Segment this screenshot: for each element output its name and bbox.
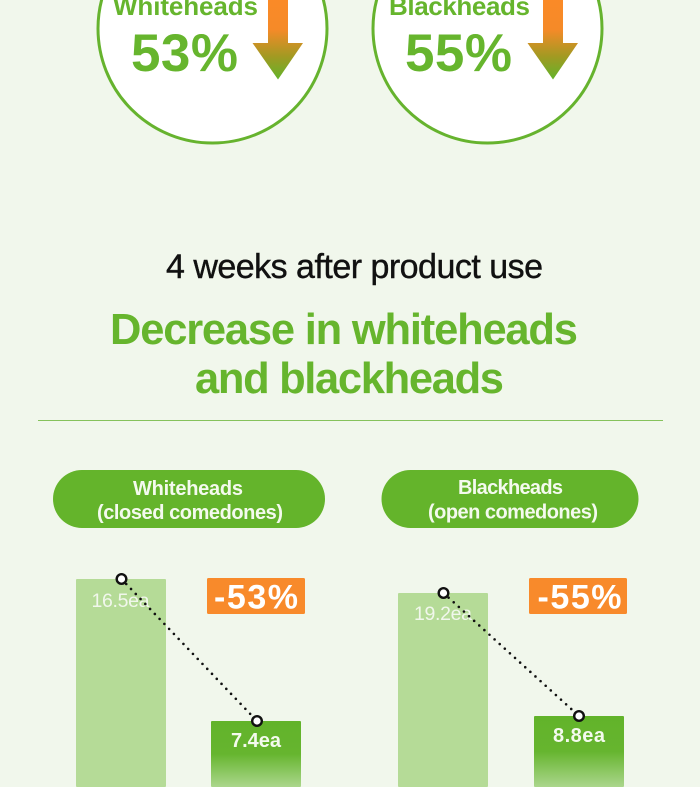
value: 8.8ea: 8.8ea [553,725,606,747]
value: 19.2ea: 19.2ea [414,603,472,625]
pill label: blackheads [382,470,638,528]
stat circle: whiteheads 53%: 53% [131,24,238,83]
bar chart: blackheads [398,578,627,787]
subheading: 4 weeks after product use [166,248,543,286]
stat circle: whiteheads 53% [98,0,327,143]
icon: down arrow [252,0,303,80]
dotted trend line [439,588,584,721]
badge: -55%: -55% [538,578,622,616]
value: 7.4ea: 7.4ea [231,730,282,752]
pill label: whiteheads [53,470,325,528]
bar chart: whiteheads [76,574,305,787]
bar: after 8.8ea [534,716,624,787]
heading: Decrease in whiteheads [110,306,578,354]
stat circle: blackheads 55% [373,0,602,143]
pill label: blackheads: Blackheads [458,477,563,499]
heading: and blackheads [195,355,504,403]
pill label: whiteheads: (closed comedones) [97,502,283,524]
pill label: blackheads: (open comedones) [428,502,598,524]
stat circle: blackheads 55%: 55% [405,24,512,83]
value: 16.5ea: 16.5ea [92,590,150,612]
bar: before 19.2ea [398,593,488,787]
bar: after 7.4ea [211,721,301,787]
dotted trend line [117,574,262,726]
pill label: whiteheads: Whiteheads [133,478,243,500]
badge: -53%: -53% [214,578,298,616]
bar: before 16.5ea [76,579,166,787]
heading [110,306,578,403]
icon: down arrow [528,0,578,80]
